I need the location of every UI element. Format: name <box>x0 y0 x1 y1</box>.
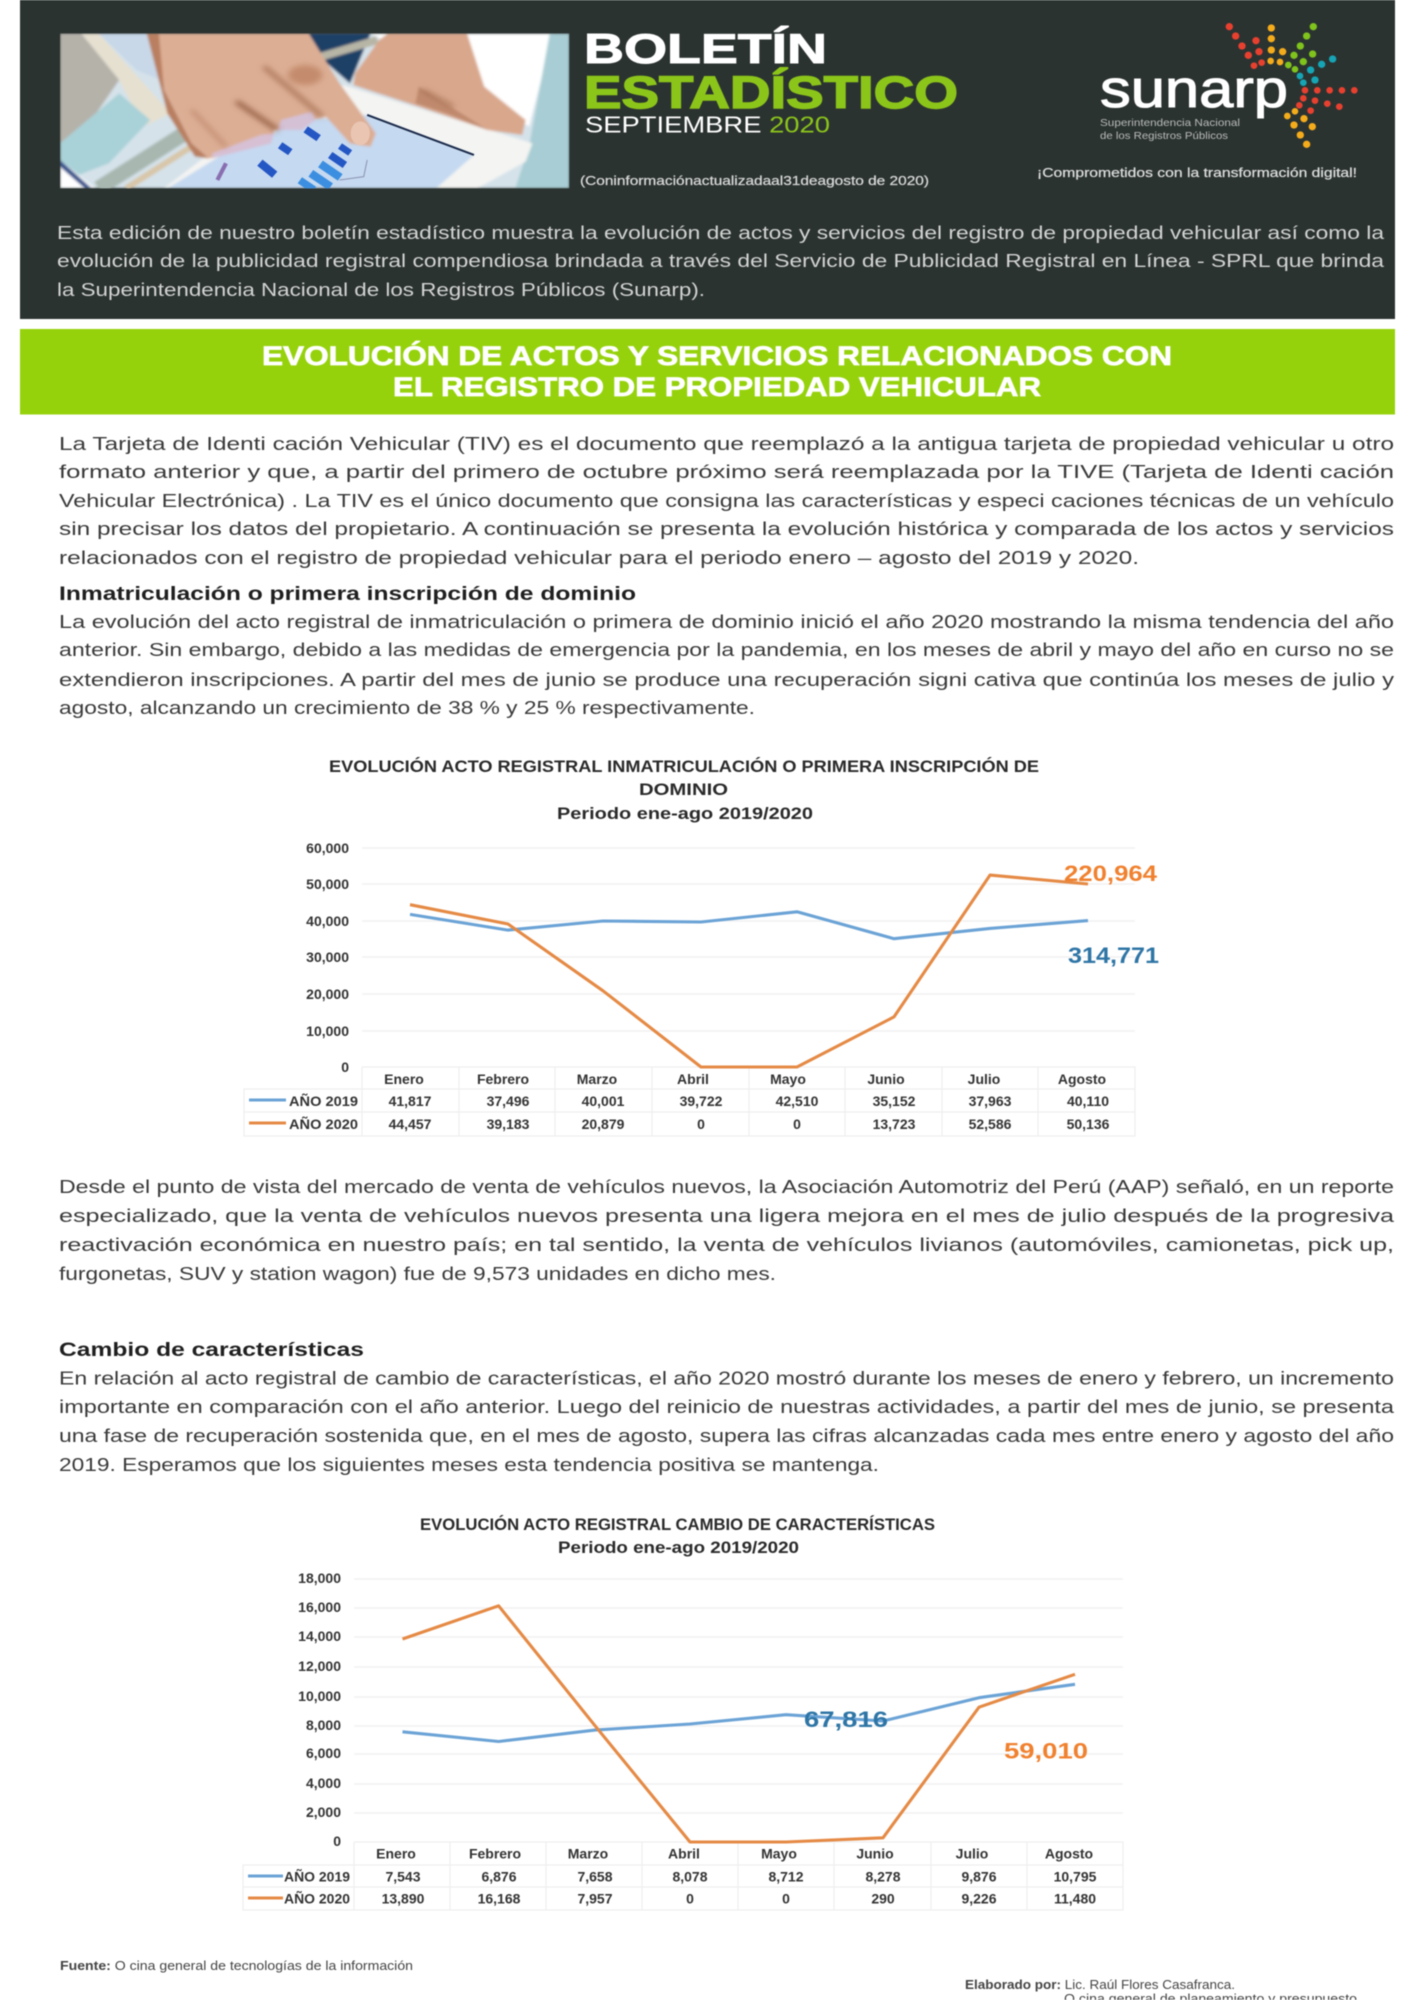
table row: año 2019 <box>249 1092 1109 1109</box>
table: month headers: Junio <box>867 1071 905 1087</box>
chart title <box>329 757 1039 823</box>
table: month headers: Junio <box>856 1846 894 1862</box>
table row: año 2019: 8,078 <box>672 1868 708 1884</box>
y axis labels: 16,000 <box>298 1599 341 1615</box>
text block: TIV introduction: Vehicular Electrónica) . La TIV es el único documento que consigna las características y especi caciones técnicas de un vehículo <box>59 490 1394 511</box>
text block: inmatriculación: agosto, alcanzando un crecimiento de 38 % y 25 % respectivamente. <box>59 697 755 718</box>
y axis labels: 50,000 <box>306 876 349 892</box>
table: month headers: Febrero <box>477 1071 529 1087</box>
table row: año 2019: 8,712 <box>768 1868 804 1884</box>
chart: inmatriculación line chart with data table <box>244 757 1159 1136</box>
intro text: la Superintendencia Nacional de los Registros Públicos (Sunarp). <box>57 279 705 300</box>
table row: año 2019: 41,817 <box>389 1093 432 1109</box>
y axis labels: 60,000 <box>306 840 349 856</box>
chart: cambio de características line chart with data table <box>243 1515 1123 1910</box>
chart title: Periodo ene-ago 2019/2020 <box>557 804 813 823</box>
table row: año 2020: 0 <box>697 1116 705 1132</box>
text block: mercado de vehículos: reactivación económica en nuestro país; en tal sentido, la venta de vehículos livianos (automóviles, camionetas, pick up, <box>59 1234 1394 1255</box>
table: month headers: Mayo <box>770 1071 806 1087</box>
table: month headers: Enero <box>376 1846 416 1862</box>
table row: año 2019: 6,876 <box>481 1868 517 1884</box>
table row: año 2020: 13,890 <box>382 1890 425 1906</box>
logo: sunarp: sunarp <box>1100 60 1288 119</box>
y axis labels: 40,000 <box>306 913 349 929</box>
table: month headers: Abril <box>677 1071 709 1087</box>
table row: año 2019: 37,496 <box>487 1093 530 1109</box>
y axis labels: 18,000 <box>298 1570 341 1586</box>
chart title: EVOLUCIÓN ACTO REGISTRAL INMATRICULACIÓN O PRIMERA INSCRIPCIÓN DE <box>329 757 1039 776</box>
table row: año 2019 <box>248 1868 1097 1884</box>
author credit <box>965 1978 1357 2000</box>
chart title <box>420 1515 935 1557</box>
table row: año 2019: 42,510 <box>776 1093 819 1109</box>
table row: año 2020: 0 <box>782 1890 790 1906</box>
table row: año 2020: 39,183 <box>487 1116 530 1132</box>
table row: año 2020: AÑO 2020 <box>289 1115 358 1132</box>
total 2019: 314,771 <box>1068 943 1159 968</box>
text block: cambio de características: importante en comparación con el año anterior. Luego del reinicio de nuestras actividades, a partir del mes de junio, se presenta <box>59 1396 1395 1417</box>
total 2020: 220,964 <box>1064 861 1158 886</box>
y axis labels <box>298 1570 341 1849</box>
tagline: ¡Comprometidos con la transformación digital! <box>1037 165 1357 180</box>
heading: cambio de características: Cambio de características <box>59 1340 364 1361</box>
table row: año 2020: 0 <box>686 1890 694 1906</box>
title: ESTADÍSTICO: ESTADÍSTICO <box>584 67 958 118</box>
table row: año 2020: 7,957 <box>577 1890 613 1906</box>
text block: inmatriculación: extendieron inscripciones. A partir del mes de junio se produce una recuperación signi cativa que continúa los meses de julio y <box>59 669 1395 690</box>
table: month headers: Agosto <box>1045 1846 1093 1862</box>
intro text: evolución de la publicidad registral compendiosa brindada a través del Servicio de Publicidad Registral en Línea - SPRL que brinda <box>57 250 1385 271</box>
table: month headers: Mayo <box>761 1846 797 1862</box>
table row: año 2019: AÑO 2019 <box>284 1868 350 1884</box>
chart title: Periodo ene-ago 2019/2020 <box>558 1538 799 1557</box>
table: month headers: Marzo <box>577 1071 617 1087</box>
table row: año 2020: 290 <box>871 1890 895 1906</box>
y axis labels: 30,000 <box>306 949 349 965</box>
heading: inmatriculación: Inmatriculación o primera inscripción de dominio <box>59 584 636 605</box>
author credit: Elaborado por: Lic. Raúl Flores Casafranca. <box>965 1978 1235 1992</box>
logo: sunarp: de los Registros Públicos <box>1100 130 1228 142</box>
line: año 2020 <box>410 875 1088 1067</box>
intro text <box>57 222 1385 300</box>
y axis labels: 0 <box>341 1059 349 1075</box>
table row: año 2020: 16,168 <box>478 1890 521 1906</box>
title: BOLETÍN: BOLETÍN <box>584 25 827 72</box>
panel: dark header <box>20 0 1395 319</box>
table row: año 2019: 9,876 <box>961 1868 997 1884</box>
table row: año 2019: AÑO 2019 <box>289 1092 358 1109</box>
source note: Fuente: O cina general de tecnologías de la información <box>60 1959 413 1973</box>
table row: año 2020 <box>249 1115 1110 1132</box>
table row: año 2020: 0 <box>793 1116 801 1132</box>
text block: cambio de características: una fase de recuperación sostenida que, en el mes de agosto, supera las cifras alcanzadas cada mes entre enero y agosto del año <box>59 1425 1394 1446</box>
y axis labels: 20,000 <box>306 986 349 1002</box>
text block: cambio de características <box>59 1368 1395 1475</box>
text block: TIV introduction: La Tarjeta de Identi cación Vehicular (TIV) es el documento que reemplazó a la antigua tarjeta de propiedad vehicular u otro <box>59 433 1394 454</box>
icon: dotted sunburst <box>1226 23 1358 148</box>
table: month headers <box>376 1846 1093 1862</box>
table: month headers: Enero <box>384 1071 424 1087</box>
table row: año 2019: 7,658 <box>577 1868 613 1884</box>
text block: mercado de vehículos <box>59 1176 1395 1284</box>
logo: sunarp <box>1100 23 1358 148</box>
table row: año 2020: 52,586 <box>969 1116 1012 1132</box>
table row: año 2019: 10,795 <box>1054 1868 1097 1884</box>
table row: año 2019: 40,110 <box>1067 1093 1109 1109</box>
table row: año 2020: 20,879 <box>582 1116 625 1132</box>
y axis labels: 12,000 <box>298 1658 341 1674</box>
text block: inmatriculación: anterior. Sin embargo, debido a las medidas de emergencia por la pandemia, en los meses de abril y mayo del año en curso no se <box>59 639 1394 660</box>
y axis labels: 6,000 <box>306 1745 341 1761</box>
y axis labels: 0 <box>333 1833 341 1849</box>
y axis labels: 10,000 <box>298 1688 341 1704</box>
y axis labels: 4,000 <box>306 1775 341 1791</box>
text block: TIV introduction: relacionados con el registro de propiedad vehicular para el periodo enero – agosto del 2019 y 2020. <box>59 547 1139 568</box>
table row: año 2020: AÑO 2020 <box>284 1890 350 1906</box>
table: month headers: Marzo <box>568 1846 608 1862</box>
total 2020: 59,010 <box>1004 1738 1088 1764</box>
y axis labels: 14,000 <box>298 1628 341 1644</box>
chart title: EVOLUCIÓN ACTO REGISTRAL CAMBIO DE CARACTERÍSTICAS <box>420 1515 935 1534</box>
line: año 2019 <box>410 912 1088 939</box>
text block: mercado de vehículos: especializado, que la venta de vehículos nuevos presenta una ligera mejora en el mes de julio después de la progresiva <box>59 1205 1395 1226</box>
photo: hands on tablet <box>60 33 569 193</box>
y axis labels: 2,000 <box>306 1804 341 1820</box>
table: month headers <box>384 1071 1106 1087</box>
table row: año 2020: 44,457 <box>389 1116 432 1132</box>
panel: green section banner: EVOLUCIÓN DE ACTOS Y SERVICIOS RELACIONADOS CON <box>262 340 1172 371</box>
table row: año 2019: 8,278 <box>865 1868 901 1884</box>
y axis labels: 8,000 <box>306 1717 341 1733</box>
table: month headers: Agosto <box>1058 1071 1106 1087</box>
data table grid <box>243 1842 1123 1910</box>
table row: año 2020: 11,480 <box>1054 1890 1096 1906</box>
table row: año 2020: 9,226 <box>961 1890 997 1906</box>
subtitle: date: SEPTIEMBRE 2020 <box>585 112 830 138</box>
y axis labels: 10,000 <box>306 1023 349 1039</box>
text block: mercado de vehículos: furgonetas, SUV y station wagon) fue de 9,573 unidades en dicho mes. <box>59 1263 776 1284</box>
table row: año 2019: 39,722 <box>680 1093 723 1109</box>
table row: año 2019: 7,543 <box>385 1868 421 1884</box>
table row: año 2019: 35,152 <box>873 1093 916 1109</box>
line: año 2019 <box>402 1684 1075 1742</box>
note: data date: (Coninformaciónactualizadaal31deagosto de 2020) <box>580 174 929 188</box>
table row: año 2020: 50,136 <box>1067 1116 1110 1132</box>
text block: TIV introduction: sin precisar los datos del propietario. A continuación se presenta la evolución histórica y comparada de los actos y servicios <box>59 518 1394 539</box>
text block: cambio de características: En relación al acto registral de cambio de características, el año 2020 mostró durante los meses de enero y febrero, un incremento <box>59 1368 1394 1388</box>
table: month headers: Abril <box>668 1846 700 1862</box>
text block: TIV introduction <box>59 433 1394 568</box>
table row: año 2019: 37,963 <box>969 1093 1012 1109</box>
intro text: Esta edición de nuestro boletín estadístico muestra la evolución de actos y servicios del registro de propiedad vehicular así como la <box>57 222 1385 243</box>
text block: inmatriculación: La evolución del acto registral de inmatriculación o primera de dominio inició el año 2020 mostrando la misma tendencia del año <box>59 611 1394 632</box>
table row: año 2020: 13,723 <box>873 1116 916 1132</box>
table: month headers: Febrero <box>469 1846 521 1862</box>
line: año 2020 <box>402 1606 1075 1842</box>
table row: año 2020 <box>248 1890 1096 1906</box>
text block: TIV introduction: formato anterior y que, a partir del primero de octubre próximo será reemplazada por la TIVE (Tarjeta de Identi cación <box>59 461 1394 482</box>
table: month headers: Julio <box>968 1071 1000 1087</box>
total 2019: 67,816 <box>804 1707 888 1732</box>
table: month headers: Julio <box>956 1846 988 1862</box>
panel: green section banner <box>20 329 1395 414</box>
text block: inmatriculación <box>59 611 1395 718</box>
text block: cambio de características: 2019. Esperamos que los siguientes meses esta tendencia positiva se mantenga. <box>59 1454 879 1475</box>
y axis labels <box>306 840 349 1075</box>
data table grid <box>244 1067 1135 1136</box>
logo: sunarp: Superintendencia Nacional <box>1100 117 1240 129</box>
chart title: DOMINIO <box>639 780 728 799</box>
panel: green section banner: EL REGISTRO DE PROPIEDAD VEHICULAR <box>393 372 1041 402</box>
table row: año 2019: 40,001 <box>582 1093 625 1109</box>
text block: mercado de vehículos: Desde el punto de vista del mercado de venta de vehículos nuevos, la Asociación Automotriz del Perú (AAP) señaló, en un reporte <box>59 1176 1394 1197</box>
